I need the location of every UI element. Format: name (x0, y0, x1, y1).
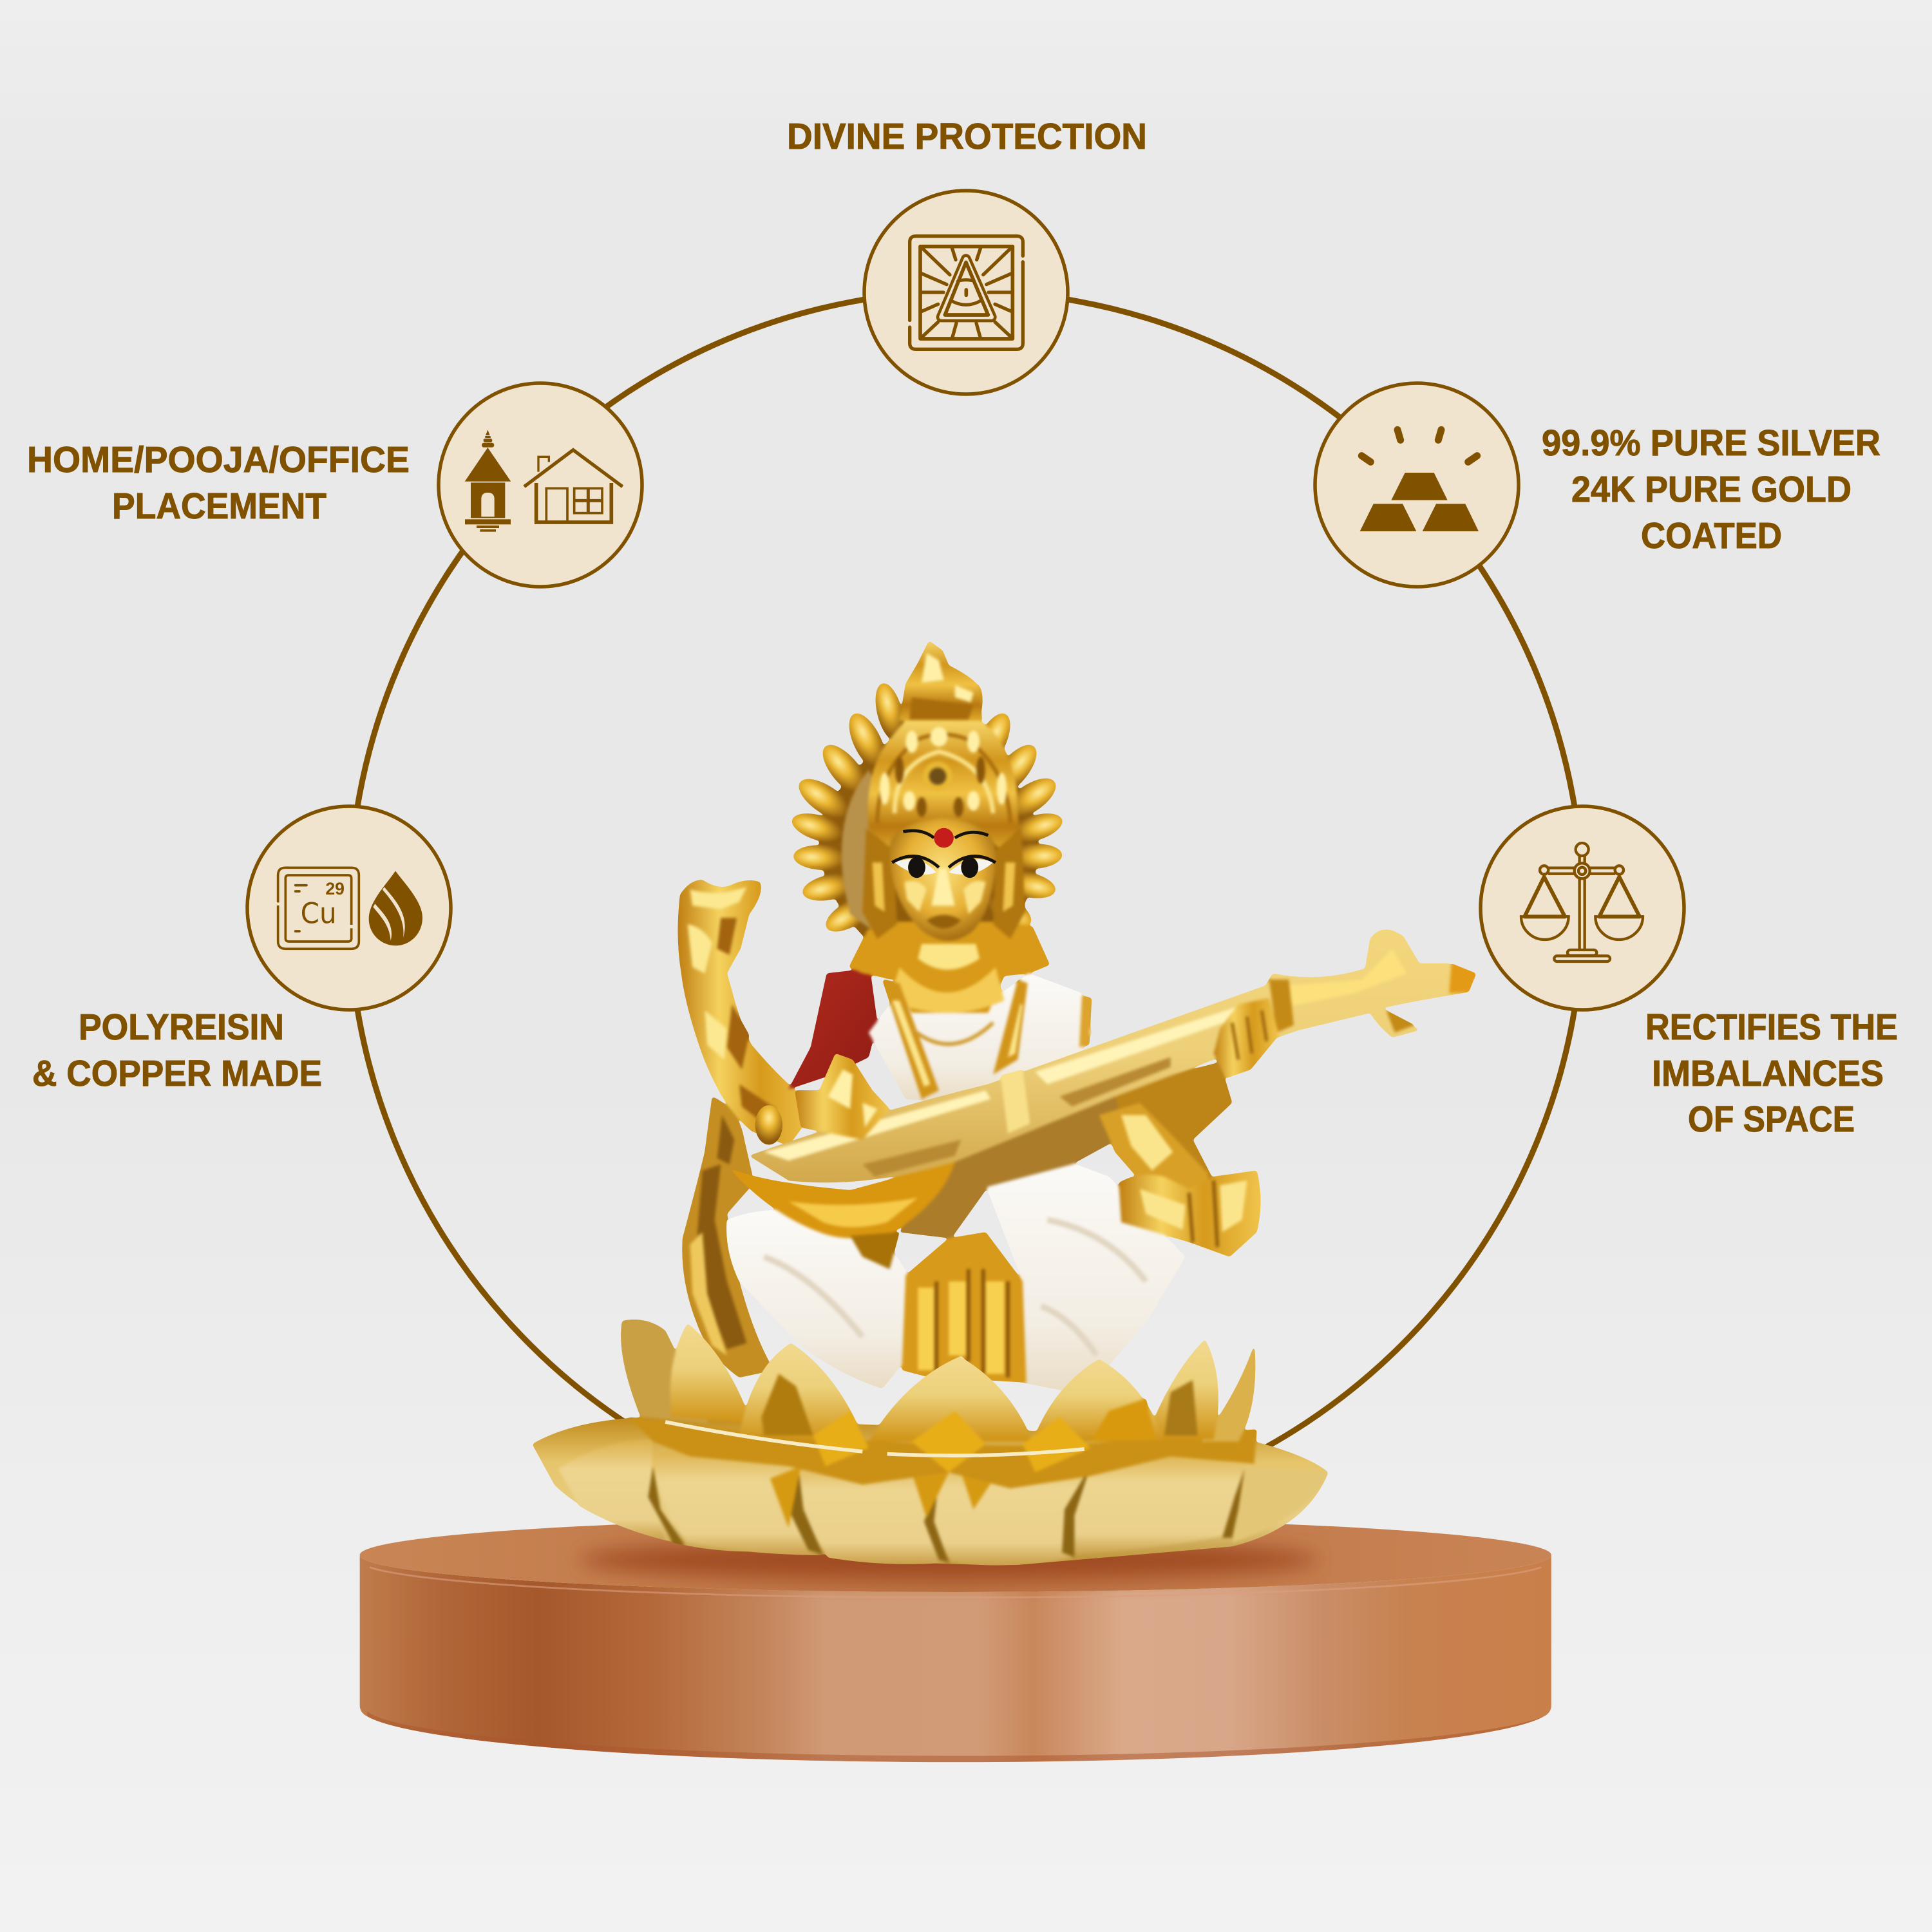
central feet (902, 1232, 1027, 1383)
back drape and seat gold (682, 1097, 774, 1378)
white legs (726, 1158, 1186, 1395)
text: silver and gold coated: COATED (1641, 515, 1782, 556)
right hand on stem (1214, 998, 1279, 1078)
text: polyreisin and copper made: POLYREISIN (79, 1007, 284, 1048)
text: silver and gold coated: 99.9% PURE SILVER (1542, 422, 1880, 464)
text: polyreisin and copper made: & COPPER MADE (32, 1053, 322, 1094)
text: rectifies imbalances of space: RECTIFIES THE (1645, 1007, 1898, 1048)
veena stem (749, 929, 1476, 1182)
side hair and ears (862, 828, 1025, 939)
crown (868, 721, 1019, 853)
badge: divine protection icon (864, 191, 1068, 394)
icon: house (524, 450, 623, 522)
necklace and shoulders (849, 922, 1050, 1099)
statue: Saraswati on lotus (533, 641, 1476, 1565)
left playing hand (755, 1054, 889, 1144)
icon: periodic table tile (278, 867, 359, 949)
lotus highlight line (665, 1422, 1084, 1455)
arm under veena (1115, 1062, 1232, 1180)
text: polyreisin and copper made (32, 1007, 322, 1094)
text: divine protection: DIVINE PROTECTION (787, 116, 1147, 157)
face (889, 818, 996, 941)
icon: drop (369, 871, 422, 945)
icon: temple (465, 430, 511, 532)
icon: periodic table tile: 29 (325, 879, 345, 898)
icon: periodic table tile: Cu (301, 896, 337, 930)
veena resonator bowl (730, 1162, 955, 1269)
lotus waist band (629, 1417, 1257, 1488)
text: rectifies imbalances of space: IMBALANCES (1652, 1053, 1884, 1094)
text: silver and gold coated (1542, 422, 1880, 556)
connector ring (349, 291, 1583, 1525)
badge: temple and house icon (439, 383, 642, 587)
badge: copper element and drop icon (247, 806, 451, 1010)
right armlet strand (1079, 996, 1092, 1047)
red cloth (788, 969, 877, 1089)
text: silver and gold coated: 24K PURE GOLD (1571, 469, 1852, 510)
crown finial (900, 641, 982, 721)
text: home pooja office placement: PLACEMENT (112, 486, 327, 527)
lotus upper petals (621, 1320, 1255, 1472)
badge: balance scale icon (1481, 806, 1684, 1010)
text: home pooja office placement: HOME/POOJA/OFFICE (27, 439, 410, 480)
badge: gold bars icon (1315, 383, 1519, 587)
text: home pooja office placement (27, 439, 410, 527)
eyes and bindi (892, 828, 996, 878)
white torso (869, 973, 1092, 1103)
pedestal (360, 1518, 1551, 1762)
veena underside (900, 1094, 1124, 1238)
raised left arm with hand (678, 880, 816, 1146)
pedestal and statue, drawn in a 1568-unit grid (360, 641, 1551, 1762)
peacock fan halo (789, 681, 1066, 943)
lotus lower petals (533, 1417, 1329, 1565)
text: rectifies imbalances of space: OF SPACE (1688, 1099, 1855, 1140)
lower hand with book (1099, 1103, 1260, 1257)
text: rectifies imbalances of space (1645, 1007, 1898, 1140)
